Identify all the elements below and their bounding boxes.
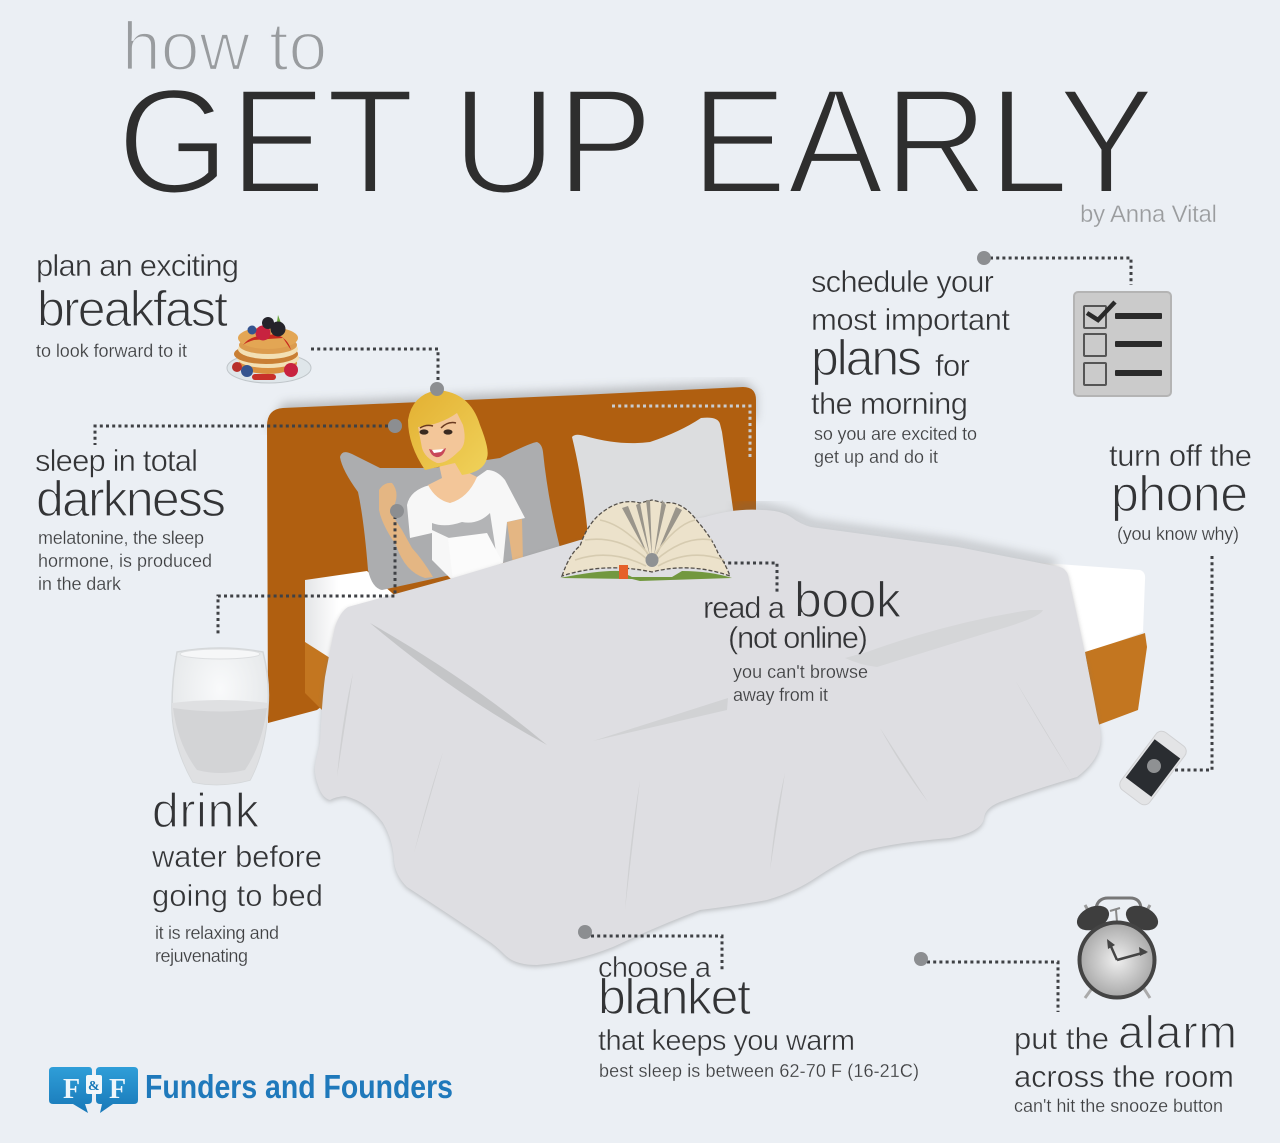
text: drink <box>151 785 323 966</box>
title: how to <box>122 7 327 85</box>
text: book: read a <box>703 590 786 625</box>
logo: Funders and Founders: & <box>88 1079 100 1094</box>
text: plans: the morning <box>811 386 968 421</box>
text: breakfast: plan an exciting <box>36 248 239 283</box>
icon: water glass <box>172 648 268 785</box>
text: blanket: choose a <box>598 952 712 984</box>
text: phone: turn off the <box>1109 438 1252 473</box>
headboard <box>267 382 756 723</box>
shirt <box>407 470 525 581</box>
text: breakfast: to look forward to it <box>36 341 187 361</box>
title: GET UP EARLY <box>117 59 1155 226</box>
text: drink: water before <box>151 839 322 874</box>
text: plans: for <box>935 348 970 383</box>
right arm <box>507 519 523 564</box>
raised arm <box>379 483 433 578</box>
byline: by Anna Vital <box>1080 201 1217 228</box>
text: drink: rejuvenating <box>155 946 248 966</box>
icon: phone <box>1117 728 1189 808</box>
text: blanket: that keeps you warm <box>598 1025 855 1057</box>
hair <box>408 390 488 475</box>
connector lines <box>95 258 1212 1012</box>
text: darkness: hormone, is produced <box>38 551 212 571</box>
text: blanket: best sleep is between 62-70 F (16-21C) <box>599 1061 919 1081</box>
text: darkness: sleep in total <box>35 443 198 478</box>
blanket soft shadow <box>315 512 1101 967</box>
text: plans: get up and do it <box>814 447 938 467</box>
woman <box>379 390 525 581</box>
text: phone <box>1109 438 1252 544</box>
text: book <box>703 572 902 705</box>
text: phone: (you know why) <box>1117 524 1239 544</box>
text: alarm: across the room <box>1014 1059 1234 1094</box>
woman pillow <box>340 442 560 590</box>
text: darkness: darkness <box>36 471 226 527</box>
connector pins <box>388 251 991 966</box>
text: darkness: melatonine, the sleep <box>38 528 204 548</box>
icon: checklist <box>1074 292 1171 396</box>
bed illustration <box>267 382 1147 967</box>
text: plans: plans <box>811 330 922 386</box>
logo: Funders and Founders: F <box>63 1074 80 1105</box>
blanket <box>315 510 1101 965</box>
icon: pancakes <box>227 315 311 383</box>
icon: alarm clock <box>1073 898 1162 998</box>
logo: Funders and Founders: Funders and Founders <box>145 1068 453 1105</box>
text: drink: it is relaxing and <box>155 923 279 943</box>
text: book: away from it <box>733 685 828 705</box>
face <box>418 413 465 463</box>
logo: Funders and Founders <box>49 1067 453 1113</box>
logo: Funders and Founders: F <box>109 1074 126 1105</box>
back pillow <box>572 418 736 560</box>
text: blanket <box>598 952 919 1081</box>
text: book: you can't browse <box>733 662 868 682</box>
text: alarm: can't hit the snooze button <box>1014 1096 1223 1116</box>
text: breakfast <box>36 248 239 361</box>
text: plans: most important <box>811 302 1010 337</box>
text: book: book <box>794 572 902 628</box>
text: darkness: in the dark <box>38 574 122 594</box>
icon: book <box>560 500 732 581</box>
text: alarm: put the <box>1014 1021 1109 1056</box>
text: blanket: blanket <box>598 969 751 1025</box>
text: alarm: alarm <box>1118 1006 1237 1058</box>
text: phone: phone <box>1111 466 1248 522</box>
blanket top shadow <box>735 507 1056 564</box>
shirt bodice <box>432 513 498 580</box>
text: breakfast: breakfast <box>37 281 228 337</box>
neck and chest <box>428 460 477 503</box>
mattress <box>305 562 1147 725</box>
text: drink: drink <box>152 785 260 838</box>
text: plans: schedule your <box>811 264 994 299</box>
text: plans <box>811 264 1010 467</box>
text: drink: going to bed <box>152 878 323 913</box>
text: plans: so you are excited to <box>814 424 977 444</box>
text: darkness <box>35 443 226 594</box>
text: alarm <box>1014 1006 1237 1116</box>
text: book: (not online) <box>728 620 868 655</box>
